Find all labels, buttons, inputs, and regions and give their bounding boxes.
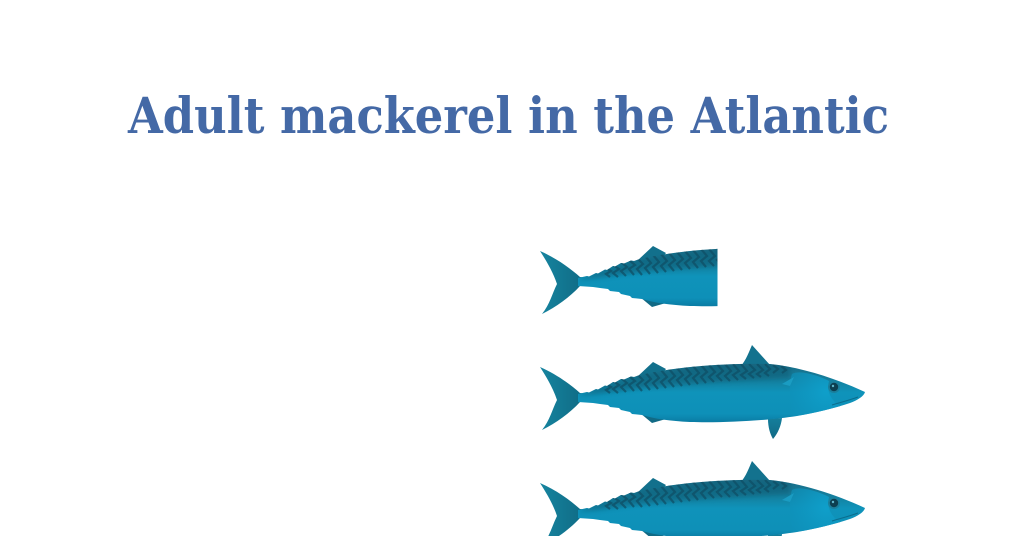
title: Adult mackerel in the Atlantic (127, 86, 889, 145)
icon: whole mackerel (second row) (540, 345, 865, 439)
icon: whole mackerel (third row, cropped by the page edge) (540, 461, 865, 536)
icon: partial mackerel (first row, cut off at the body) (540, 246, 718, 314)
